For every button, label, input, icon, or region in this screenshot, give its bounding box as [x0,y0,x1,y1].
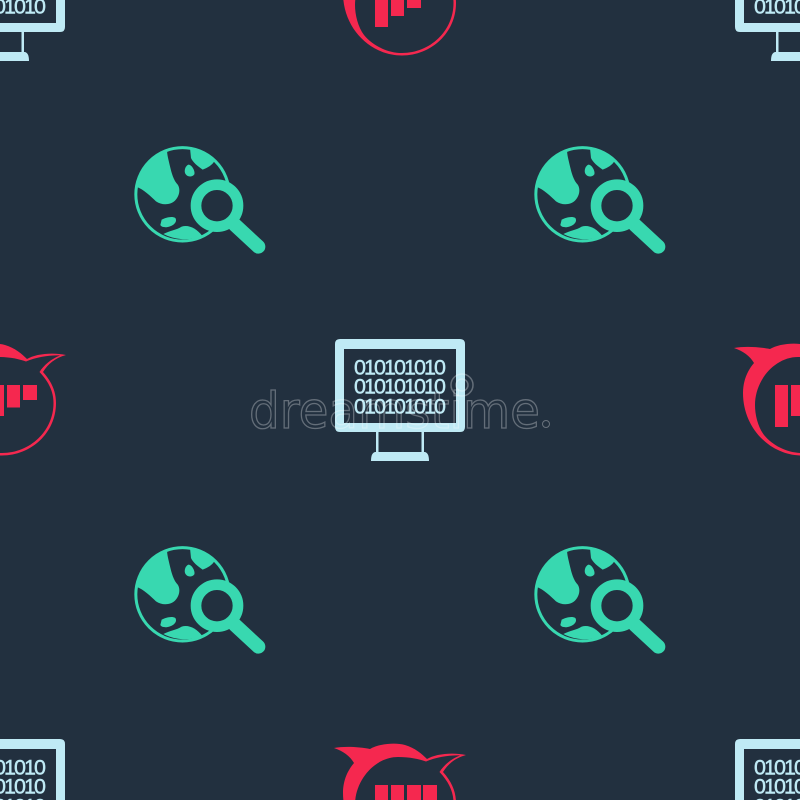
icon: cat chart, bottom [334,744,466,800]
watermark: dreamstime [249,382,540,440]
icon: binary monitor, bottom left corner [0,739,65,800]
icon: globe with magnifier, bottom right [536,548,658,647]
icon: cat chart, left [0,344,66,456]
icon: binary monitor, bottom right corner [735,739,800,800]
icon: globe with magnifier, bottom left [136,548,258,647]
icon: binary monitor, center: 010101010 [354,394,446,418]
icon: cat chart, right [734,344,800,456]
icon: globe with magnifier, top right [536,148,658,247]
icon: binary monitor, top right corner [735,0,800,61]
icon: binary monitor, top left corner [0,0,65,61]
icon: binary monitor, center [335,339,465,461]
icon: binary monitor, center: 010101010 [354,356,446,380]
icon: binary monitor, center: 010101010 [354,374,446,398]
icon: cat chart, top [334,0,466,56]
icon: globe with magnifier, top left [136,148,258,247]
